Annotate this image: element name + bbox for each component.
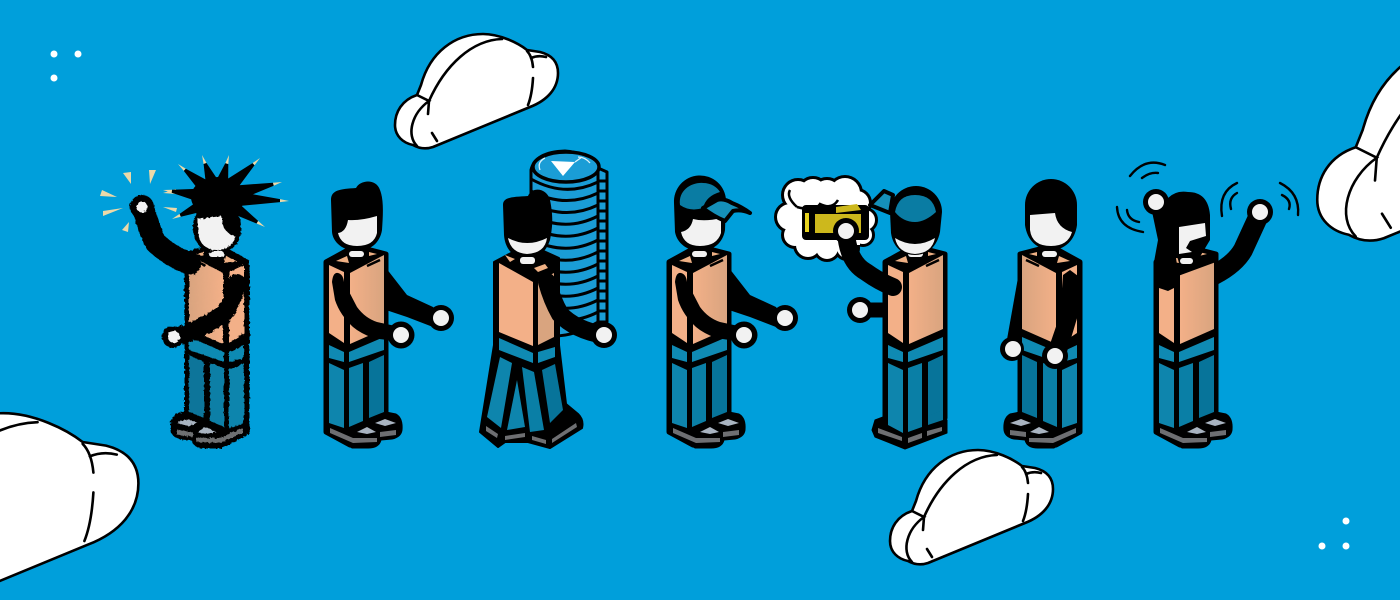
dots: bottom right	[1318, 518, 1350, 550]
back arm	[729, 268, 784, 327]
head	[331, 182, 383, 251]
raised arm	[1214, 213, 1260, 275]
rough-edged body and arms	[130, 195, 249, 448]
front arm	[1048, 270, 1078, 355]
cloud: bottom left	[0, 413, 138, 600]
back arm	[386, 268, 441, 327]
back arm	[1006, 272, 1026, 350]
shoes	[667, 412, 745, 448]
cap dome	[680, 183, 720, 209]
head	[890, 186, 942, 255]
camera	[802, 204, 869, 240]
figure 2: dark-haired person	[324, 182, 454, 448]
shoes	[1154, 412, 1232, 448]
figure 1: spiky hair, sparkling hand	[100, 155, 289, 448]
front arm	[332, 273, 400, 342]
torso	[487, 255, 563, 432]
body	[669, 246, 729, 445]
hands	[1143, 189, 1273, 225]
waves	[1117, 163, 1298, 232]
cap brim	[703, 199, 750, 221]
hands	[730, 305, 798, 348]
head	[1025, 179, 1077, 250]
shoe soles	[673, 419, 739, 443]
spiky hair	[172, 163, 280, 224]
raised arm	[846, 232, 893, 287]
front arm	[675, 273, 743, 342]
figure 4: person with teal cap	[667, 175, 798, 448]
legs and shoes	[480, 244, 582, 448]
cloud: top centre	[395, 34, 558, 148]
cap brim	[870, 191, 893, 213]
shoes	[1004, 412, 1082, 448]
neck	[1180, 258, 1193, 264]
head	[503, 190, 552, 259]
cloud: bottom centre	[890, 450, 1053, 564]
smile	[895, 238, 935, 254]
figure 3: coin stack behind walking person	[480, 151, 617, 448]
hand	[591, 322, 617, 348]
figure 5: person with cap, camera in thought cloud	[777, 178, 947, 449]
shoes	[872, 417, 947, 449]
hands	[833, 218, 873, 323]
face	[1030, 213, 1072, 246]
cloud: right edge	[1317, 40, 1400, 241]
body	[326, 246, 386, 445]
thought cloud	[777, 178, 875, 259]
coin stack	[531, 151, 607, 336]
face	[338, 216, 377, 246]
arm	[547, 282, 604, 335]
sparks around raised hand	[100, 170, 177, 232]
cap dome	[895, 195, 936, 222]
body	[1156, 246, 1216, 445]
back arm and hand	[860, 302, 892, 318]
figure 7: long hair, waving both hands	[1117, 163, 1298, 448]
face	[508, 238, 547, 254]
neck	[520, 257, 535, 264]
spike tips	[163, 155, 289, 227]
shoe soles	[330, 419, 396, 443]
face	[1179, 223, 1206, 254]
torso top shadow	[1178, 253, 1216, 276]
shoe soles	[1160, 419, 1226, 443]
dots: top left	[50, 50, 82, 82]
hands	[1000, 337, 1068, 369]
head	[674, 175, 726, 251]
shoes	[324, 412, 402, 448]
body	[1020, 246, 1080, 445]
lower legs and soles	[878, 410, 943, 443]
hair and head	[1150, 192, 1210, 291]
figure 6: arms down	[1000, 179, 1082, 448]
face	[681, 218, 721, 246]
shoe soles	[1010, 419, 1076, 443]
body	[885, 246, 945, 445]
hands	[388, 305, 454, 348]
